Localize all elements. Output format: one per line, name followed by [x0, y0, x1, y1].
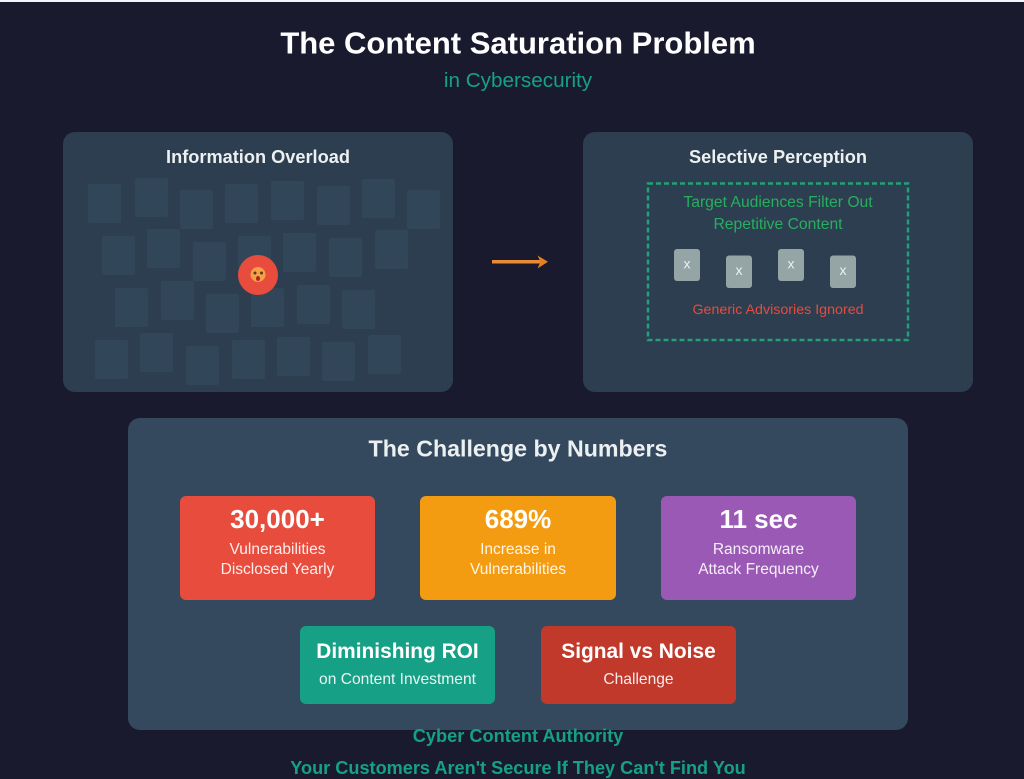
- card: signal vs noise: Signal vs Noise: [561, 640, 716, 663]
- footer tagline: Your Customers Aren't Secure If They Can't Find You: [290, 758, 746, 778]
- ignored caption: Generic Advisories Ignored: [692, 302, 864, 318]
- filtered item 4: [830, 256, 856, 288]
- subtitle: in Cybersecurity: [444, 69, 593, 92]
- filter text: Repetitive Content: [713, 216, 843, 233]
- stat: ransomware: Ransomware: [713, 541, 804, 558]
- stat: increase: 689%: [485, 504, 551, 534]
- stat: increase: Increase in: [480, 541, 556, 558]
- heading: information overload: Information Overload: [166, 147, 350, 167]
- stat: increase: Vulnerabilities: [470, 561, 566, 578]
- filtered item 2: x: [736, 262, 742, 278]
- heading: challenge: The Challenge by Numbers: [369, 436, 667, 462]
- panel: selective perception: [583, 132, 973, 392]
- card: diminishing ROI: [300, 626, 495, 704]
- stat: ransomware: [661, 496, 856, 600]
- filtered item 3: [778, 249, 804, 281]
- filter box: [648, 184, 908, 340]
- filtered item 1: [674, 249, 700, 281]
- stat: ransomware: Attack Frequency: [698, 561, 819, 578]
- icon: overwhelmed face: [238, 255, 278, 295]
- heading: selective perception: Selective Perception: [689, 147, 867, 167]
- card: signal vs noise: Challenge: [603, 671, 674, 688]
- card: signal vs noise: [541, 626, 736, 704]
- card: diminishing ROI: Diminishing ROI: [316, 640, 479, 663]
- stat: vulnerabilities: [180, 496, 375, 600]
- panel: the challenge by numbers: [128, 418, 908, 730]
- stat: vulnerabilities: Disclosed Yearly: [221, 561, 335, 578]
- stat: increase: [420, 496, 616, 600]
- filter text: Target Audiences Filter Out: [683, 194, 873, 211]
- filtered item 2: [726, 256, 752, 288]
- stat: vulnerabilities: Vulnerabilities: [230, 541, 326, 558]
- content pile: [88, 178, 440, 385]
- filtered item 1: x: [684, 256, 690, 272]
- filtered item 4: x: [840, 262, 846, 278]
- filtered item 3: x: [788, 256, 794, 272]
- card: diminishing ROI: on Content Investment: [319, 671, 477, 688]
- panel: information overload: [63, 132, 453, 392]
- footer brand: Cyber Content Authority: [413, 726, 624, 746]
- stat: vulnerabilities: 30,000+: [230, 504, 325, 534]
- title: The Content Saturation Problem: [280, 26, 756, 60]
- arrow: [492, 256, 548, 268]
- stat: ransomware: 11 sec: [719, 504, 798, 534]
